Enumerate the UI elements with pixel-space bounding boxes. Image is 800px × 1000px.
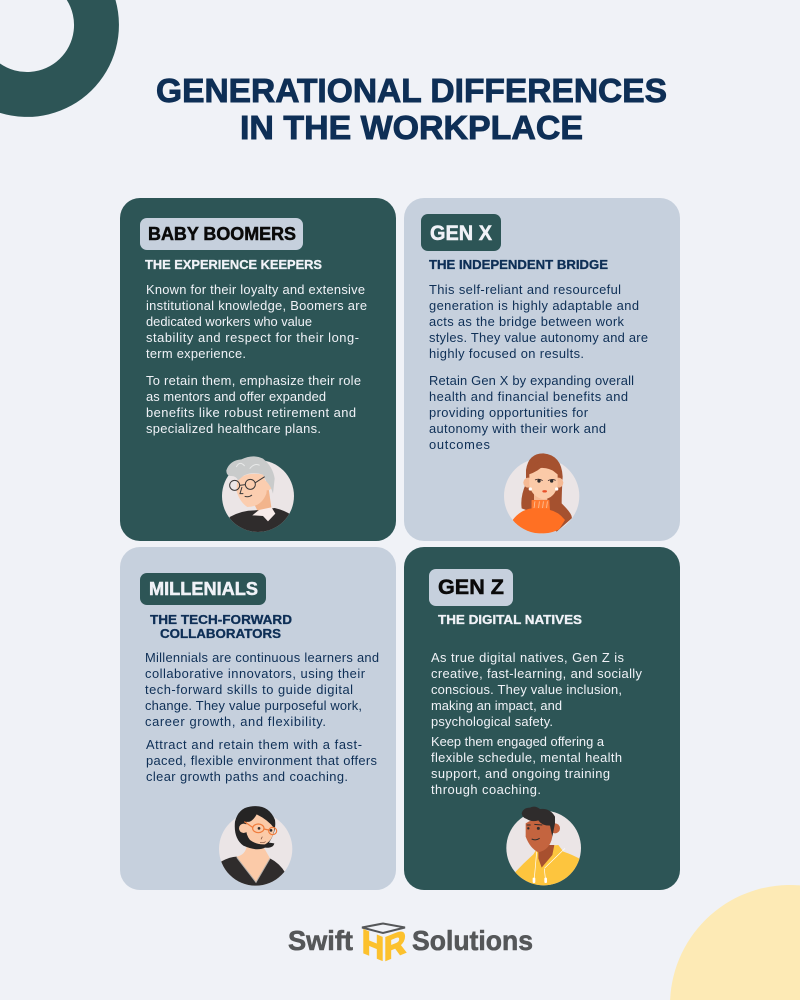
panel: gen z <box>404 547 680 890</box>
text: gen z retention <box>431 734 622 797</box>
text: millennials description <box>145 650 379 729</box>
text: gen x description: styles. They value autonomy and are <box>429 330 648 345</box>
text: boomers retention <box>146 373 361 436</box>
text: gen z description <box>431 650 643 729</box>
label: gen x: GEN X <box>430 222 492 245</box>
text: gen x description: generation is highly adaptable and <box>429 298 639 313</box>
icon: older man avatar <box>222 456 294 535</box>
panel: gen x <box>404 198 680 541</box>
label: millenials <box>140 573 266 605</box>
panel: millennials <box>120 547 396 890</box>
label: gen x <box>421 214 501 251</box>
subheading: the experience keepers: THE EXPERIENCE KEEPERS <box>145 258 322 272</box>
text: boomers retention: benefits like robust retirement and <box>146 405 356 420</box>
icon: woman avatar with glasses <box>219 806 292 888</box>
decorative ring top left <box>0 0 119 117</box>
text: gen x description <box>429 282 648 361</box>
text: gen z retention: Keep them engaged offering a <box>431 734 605 749</box>
text: gen x description: This self-reliant and resourceful <box>429 282 621 297</box>
text: boomers description: term experience. <box>146 346 246 361</box>
icon: roof diamond <box>362 924 405 933</box>
subheading: the tech-forward collaborators: COLLABORATORS <box>160 627 281 641</box>
text: gen x description: highly focused on results. <box>429 346 584 361</box>
subheading: the digital natives: THE DIGITAL NATIVES <box>438 613 582 627</box>
text: gen z retention: support, and ongoing training <box>431 766 610 781</box>
text: gen x retention: health and financial benefits and <box>429 389 628 404</box>
subheading: the independent bridge: THE INDEPENDENT BRIDGE <box>429 258 608 272</box>
label: baby boomers: BABY BOOMERS <box>148 224 296 244</box>
decorative circle bottom right <box>670 885 800 1000</box>
subheading: the tech-forward collaborators: THE TECH-FORWARD <box>150 613 292 627</box>
text: gen z description: making an impact, and <box>431 698 562 713</box>
text: boomers retention: specialized healthcare plans. <box>146 421 321 436</box>
text: gen x description: acts as the bridge between work <box>429 314 625 329</box>
text: millennials description: career growth, and flexibility. <box>145 714 326 729</box>
text: boomers retention: as mentors and offer expanded <box>146 389 326 404</box>
text: millennials description: collaborative innovators, using their <box>145 666 366 681</box>
text: boomers description: stability and respect for their long- <box>146 330 359 345</box>
label: gen z <box>429 569 513 606</box>
subheading: the tech-forward collaborators <box>150 613 292 641</box>
text: gen z description: psychological safety. <box>431 714 553 729</box>
text: boomers description: institutional knowledge, Boomers are <box>146 298 367 313</box>
text: millennials retention <box>146 737 377 784</box>
title: IN THE WORKPLACE <box>240 109 583 146</box>
label: gen z: GEN Z <box>438 576 504 599</box>
icon: woman avatar with orange sweater <box>504 453 579 534</box>
text: gen z description: creative, fast-learning, and socially <box>431 666 643 681</box>
text: gen x retention: Retain Gen X by expanding overall <box>429 373 634 388</box>
logo: Swift HR Solutions: Swift <box>288 925 353 956</box>
text: boomers description: Known for their loyalty and extensive <box>146 282 365 297</box>
logo: Swift HR Solutions: Solutions <box>412 925 533 956</box>
text: boomers description <box>146 282 367 361</box>
text: boomers description: dedicated workers who value <box>146 314 312 329</box>
text: gen x retention: providing opportunities for <box>429 405 589 420</box>
icon: young man avatar with yellow hoodie <box>506 807 582 888</box>
text: millennials retention: Attract and retain them with a fast- <box>146 737 362 752</box>
text: millennials description: tech-forward skills to guide digital <box>145 682 353 697</box>
logo mark letters HR: R <box>384 923 406 969</box>
text: gen z description: conscious. They value inclusion, <box>431 682 622 697</box>
logo mark letters HR: H <box>362 923 384 969</box>
text: gen x retention <box>429 373 634 452</box>
text: millennials description: change. They value purposeful work, <box>145 698 362 713</box>
text: gen z description: As true digital natives, Gen Z is <box>431 650 624 665</box>
title: GENERATIONAL DIFFERENCES <box>156 72 667 109</box>
text: gen z retention: flexible schedule, mental health <box>431 750 622 765</box>
text: gen z retention: through coaching. <box>431 782 541 797</box>
label: baby boomers <box>140 218 303 250</box>
text: gen x retention: outcomes <box>429 437 490 452</box>
label: millenials: MILLENIALS <box>149 579 258 599</box>
text: boomers retention: To retain them, emphasize their role <box>146 373 361 388</box>
text: millennials retention: clear growth paths and coaching. <box>146 769 348 784</box>
title <box>156 72 667 146</box>
logo mark letters HR <box>362 923 406 969</box>
text: gen x retention: autonomy with their work and <box>429 421 606 436</box>
panel: baby boomers <box>120 198 396 541</box>
text: millennials description: Millennials are continuous learners and <box>145 650 379 665</box>
logo: Swift HR Solutions <box>288 923 533 969</box>
text: millennials retention: paced, flexible environment that offers <box>146 753 377 768</box>
